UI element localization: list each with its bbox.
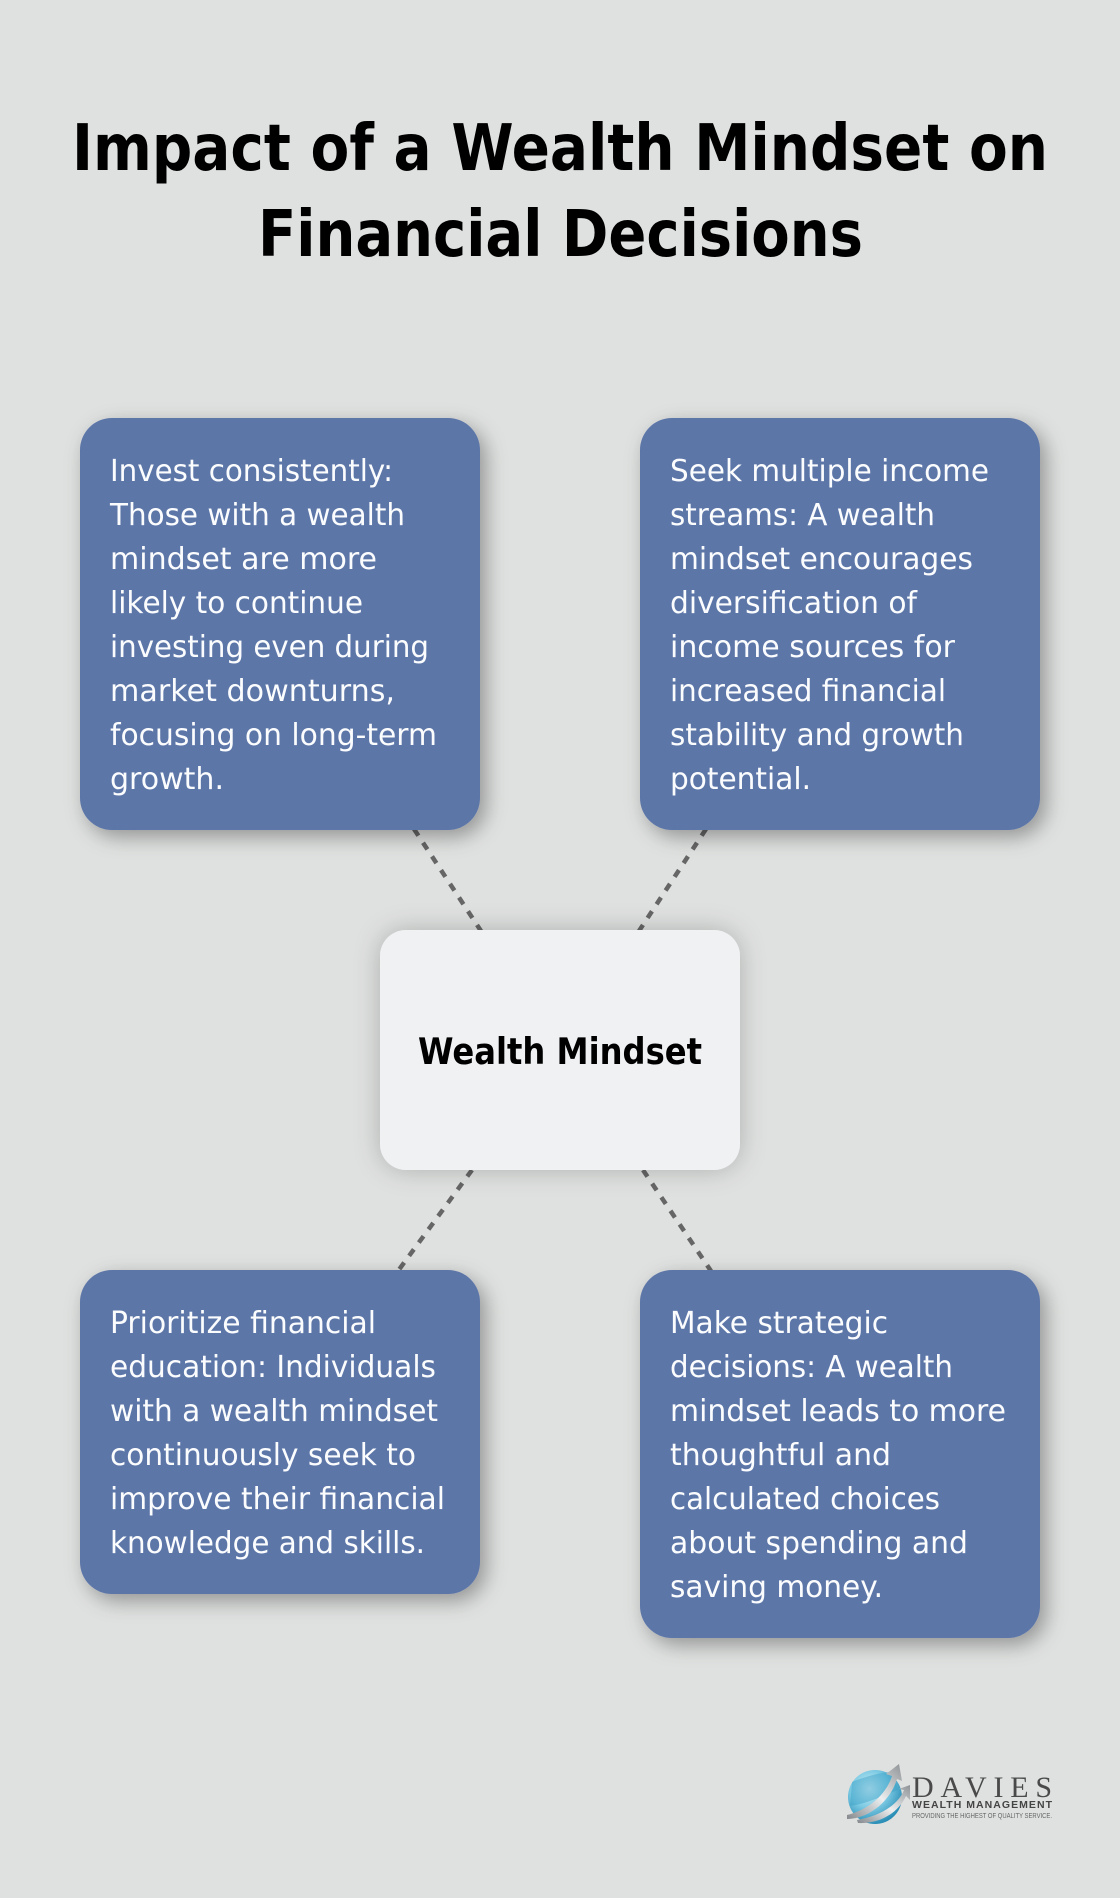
connector: invest to center xyxy=(414,829,481,931)
panel: financial education: improve their financial xyxy=(110,1482,445,1517)
panel: invest consistently: growth. xyxy=(110,762,224,797)
panel: financial education: continuously seek to xyxy=(110,1438,416,1473)
panel: strategic decisions xyxy=(640,1270,1040,1638)
title: Financial Decisions xyxy=(258,198,863,272)
icon: globe with arrows xyxy=(847,1764,910,1824)
panel: multiple income streams: increased financial xyxy=(670,674,946,709)
panel: invest consistently: mindset are more xyxy=(110,542,377,577)
logo: Davies Wealth Management: PROVIDING THE HIGHEST OF QUALITY SERVICE. xyxy=(912,1811,1052,1820)
panel: invest consistently xyxy=(80,418,480,830)
panel: financial education: Prioritize financial xyxy=(110,1306,376,1341)
panel: invest consistently: focusing on long-term xyxy=(110,718,437,753)
panel: invest consistently: Those with a wealth xyxy=(109,498,405,533)
panel: strategic decisions: calculated choices xyxy=(670,1482,940,1517)
panel: strategic decisions: about spending and xyxy=(670,1526,968,1561)
panel: invest consistently: likely to continue xyxy=(110,586,363,621)
panel: strategic decisions: decisions: A wealth xyxy=(670,1350,953,1385)
panel: multiple income streams: potential. xyxy=(670,762,811,797)
connector: income streams to center xyxy=(639,829,706,931)
panel: multiple income streams: Seek multiple income xyxy=(670,454,989,489)
panel: multiple income streams xyxy=(640,418,1040,830)
panel: financial education: education: Individuals xyxy=(110,1350,436,1385)
logo: Davies Wealth Management: WEALTH MANAGEMENT xyxy=(912,1799,1053,1811)
panel: invest consistently: investing even during xyxy=(110,630,429,665)
panel: multiple income streams: income sources for xyxy=(670,630,955,665)
panel: strategic decisions: Make strategic xyxy=(670,1306,888,1341)
logo: Davies Wealth Management xyxy=(847,1764,1053,1824)
panel: strategic decisions: thoughtful and xyxy=(670,1438,891,1473)
panel: financial education: knowledge and skills. xyxy=(110,1526,425,1561)
panel: invest consistently: Invest consistently: xyxy=(110,454,393,489)
logo: Davies Wealth Management: DAVIES xyxy=(912,1771,1052,1804)
panel: strategic decisions: saving money. xyxy=(670,1570,883,1605)
panel: center wealth mindset: Wealth Mindset xyxy=(418,1030,702,1073)
panel: invest consistently: market downturns, xyxy=(110,674,395,709)
panel: strategic decisions: mindset leads to more xyxy=(670,1394,1006,1429)
connector: decisions to center xyxy=(643,1170,711,1271)
panel: multiple income streams: streams: A wealth xyxy=(670,498,935,533)
panel: financial education: with a wealth mindset xyxy=(110,1394,438,1429)
panel: multiple income streams: diversification of xyxy=(670,586,918,621)
connector: education to center xyxy=(398,1170,472,1271)
panel: financial education xyxy=(80,1270,480,1594)
panel: multiple income streams: stability and growth xyxy=(670,718,964,753)
panel: multiple income streams: mindset encourages xyxy=(670,542,973,577)
title xyxy=(72,112,1048,272)
panel: center wealth mindset xyxy=(380,930,740,1170)
